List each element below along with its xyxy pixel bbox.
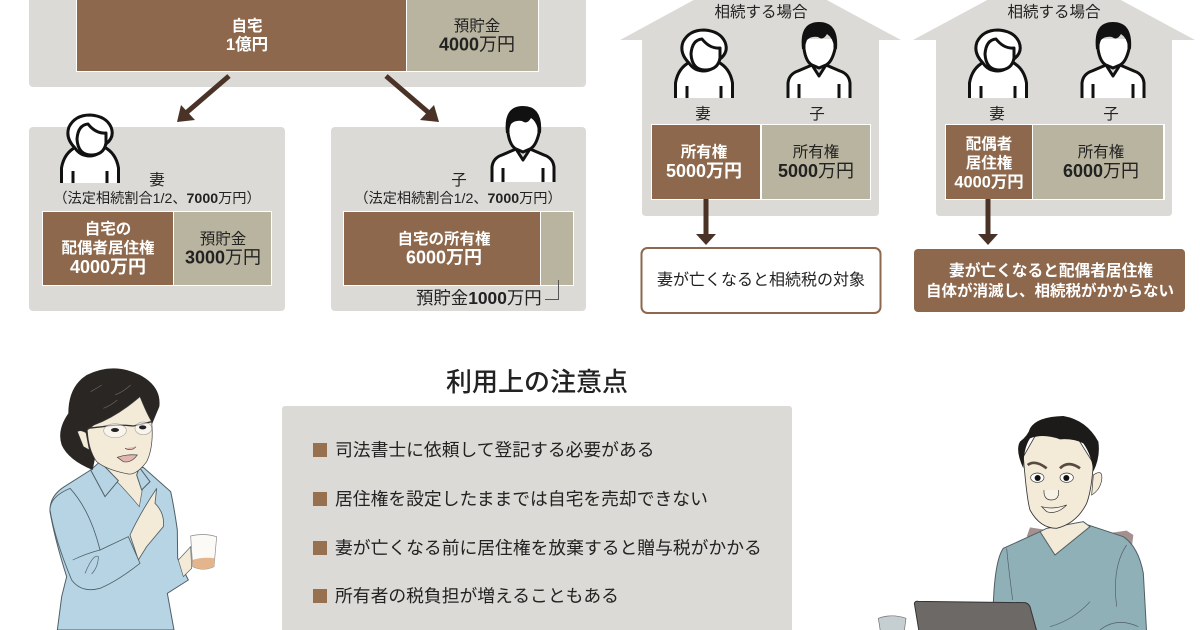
labels xyxy=(989,105,1119,123)
child breakdown bar xyxy=(343,211,574,286)
arrow: to child xyxy=(386,76,439,122)
residence bar xyxy=(945,124,1165,200)
home segment: 自宅 xyxy=(231,16,263,35)
panel: total estate xyxy=(29,0,586,87)
ownership bar: 所有権 xyxy=(793,143,839,161)
heading: 相続する場合 xyxy=(714,3,808,21)
residence bar: 所有権 xyxy=(1078,143,1124,161)
home segment xyxy=(77,0,406,71)
wife statutory share: （法定相続割合1/2、7000万円） xyxy=(53,190,261,207)
item 4: 所有者の税負担が増えることもある xyxy=(335,586,619,606)
icon: child xyxy=(788,22,850,98)
wife label: 妻 xyxy=(149,171,165,189)
arrow: to wife xyxy=(177,76,229,122)
wife breakdown bar: 3000万円 xyxy=(185,248,261,268)
callout: ownership result: 妻が亡くなると相続税の対象 xyxy=(657,271,865,289)
callout: residence result: 妻が亡くなると配偶者居住権 xyxy=(949,261,1153,280)
labels: 妻 xyxy=(695,105,711,123)
savings segment xyxy=(407,0,538,71)
child breakdown bar: 自宅の所有権 xyxy=(397,229,491,248)
illustration: man xyxy=(878,416,1147,630)
callout: ownership result xyxy=(642,248,880,313)
ownership bar xyxy=(651,124,871,200)
arrow: residence result xyxy=(978,199,998,245)
labels xyxy=(695,105,825,123)
wife breakdown bar: 4000万円 xyxy=(70,257,146,277)
illustration: woman xyxy=(50,368,217,630)
item 1: 司法書士に依頼して登記する必要がある xyxy=(335,440,655,460)
panel: child share xyxy=(331,106,586,311)
residence bar: 4000万円 xyxy=(954,174,1024,192)
savings note: 預貯金1000万円 xyxy=(416,288,542,308)
savings segment: 預貯金 xyxy=(454,17,500,35)
item 3: 妻が亡くなる前に居住権を放棄すると贈与税がかかる xyxy=(335,538,762,558)
icon: wife xyxy=(969,30,1027,98)
panel: house, ownership case xyxy=(620,0,901,216)
residence bar: 配偶者 xyxy=(966,135,1012,153)
residence bar: 6000万円 xyxy=(1063,161,1139,181)
panel: wife share xyxy=(29,115,285,311)
wife breakdown bar: 配偶者居住権 xyxy=(61,238,155,257)
ownership bar: 5000万円 xyxy=(666,161,742,181)
panel: cautions xyxy=(282,406,792,630)
savings segment: 4000万円 xyxy=(439,34,515,54)
child breakdown bar: 6000万円 xyxy=(406,248,482,268)
home segment: 1億円 xyxy=(226,35,268,54)
child label: 子 xyxy=(451,171,467,189)
icon: child xyxy=(492,106,554,182)
icon: wife xyxy=(61,115,119,183)
heading: 相続する場合 xyxy=(1007,3,1101,21)
panel: house, spousal residence case xyxy=(913,0,1195,216)
callout: residence result xyxy=(914,249,1185,312)
labels: 妻 xyxy=(989,105,1005,123)
labels: 子 xyxy=(809,105,825,123)
wife breakdown bar: 自宅の xyxy=(85,219,131,238)
wife breakdown bar: 預貯金 xyxy=(200,230,246,248)
ownership bar: 5000万円 xyxy=(778,161,854,181)
child statutory share: （法定相続割合1/2、7000万円） xyxy=(354,190,562,207)
callout: residence result: 自体が消滅し、相続税がかからない xyxy=(926,281,1174,300)
icon: wife xyxy=(675,30,733,98)
icon: child xyxy=(1082,22,1144,98)
labels: 子 xyxy=(1103,105,1119,123)
savings note xyxy=(416,280,558,308)
wife breakdown bar xyxy=(42,211,272,286)
residence bar: 居住権 xyxy=(966,153,1013,172)
heading: cautions: 利用上の注意点 xyxy=(446,367,628,397)
arrow: ownership result xyxy=(696,199,716,245)
ownership bar: 所有権 xyxy=(681,142,728,161)
item 2: 居住権を設定したままでは自宅を売却できない xyxy=(335,489,708,509)
